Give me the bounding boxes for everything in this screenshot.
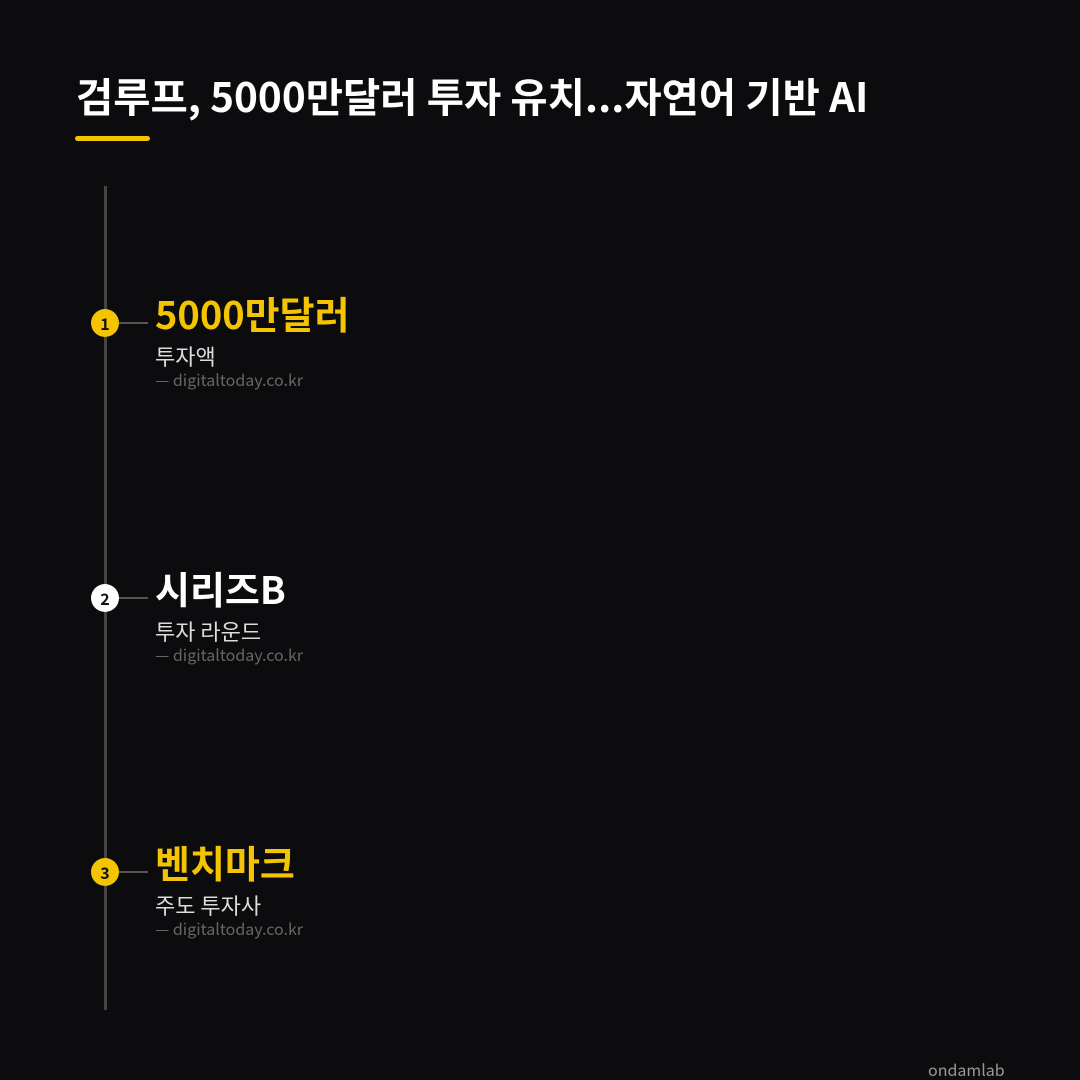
item 2 xyxy=(91,560,303,666)
item 3: — digitaltoday.co.kr xyxy=(155,916,303,940)
item 2: — digitaltoday.co.kr xyxy=(155,642,303,666)
item 2: 2 xyxy=(100,586,110,610)
item 3: 주도 투자사 xyxy=(155,889,261,921)
item 1: — digitaltoday.co.kr xyxy=(155,367,303,391)
item 1 xyxy=(91,285,350,391)
item 3: 3 xyxy=(100,860,110,884)
item 1: 투자액 xyxy=(155,340,216,372)
item 1: 5000만달러 xyxy=(155,285,350,340)
title: 검루프, 5000만달러 투자 유치...자연어 기반 AI xyxy=(76,65,868,124)
item 1: 1 xyxy=(100,311,110,335)
item 3: 벤치마크 xyxy=(155,834,295,889)
item 2: 시리즈B xyxy=(155,560,286,615)
timeline line xyxy=(104,186,107,1010)
item 2: 투자 라운드 xyxy=(155,615,261,647)
title underline xyxy=(75,136,150,141)
item 3 xyxy=(91,834,303,940)
